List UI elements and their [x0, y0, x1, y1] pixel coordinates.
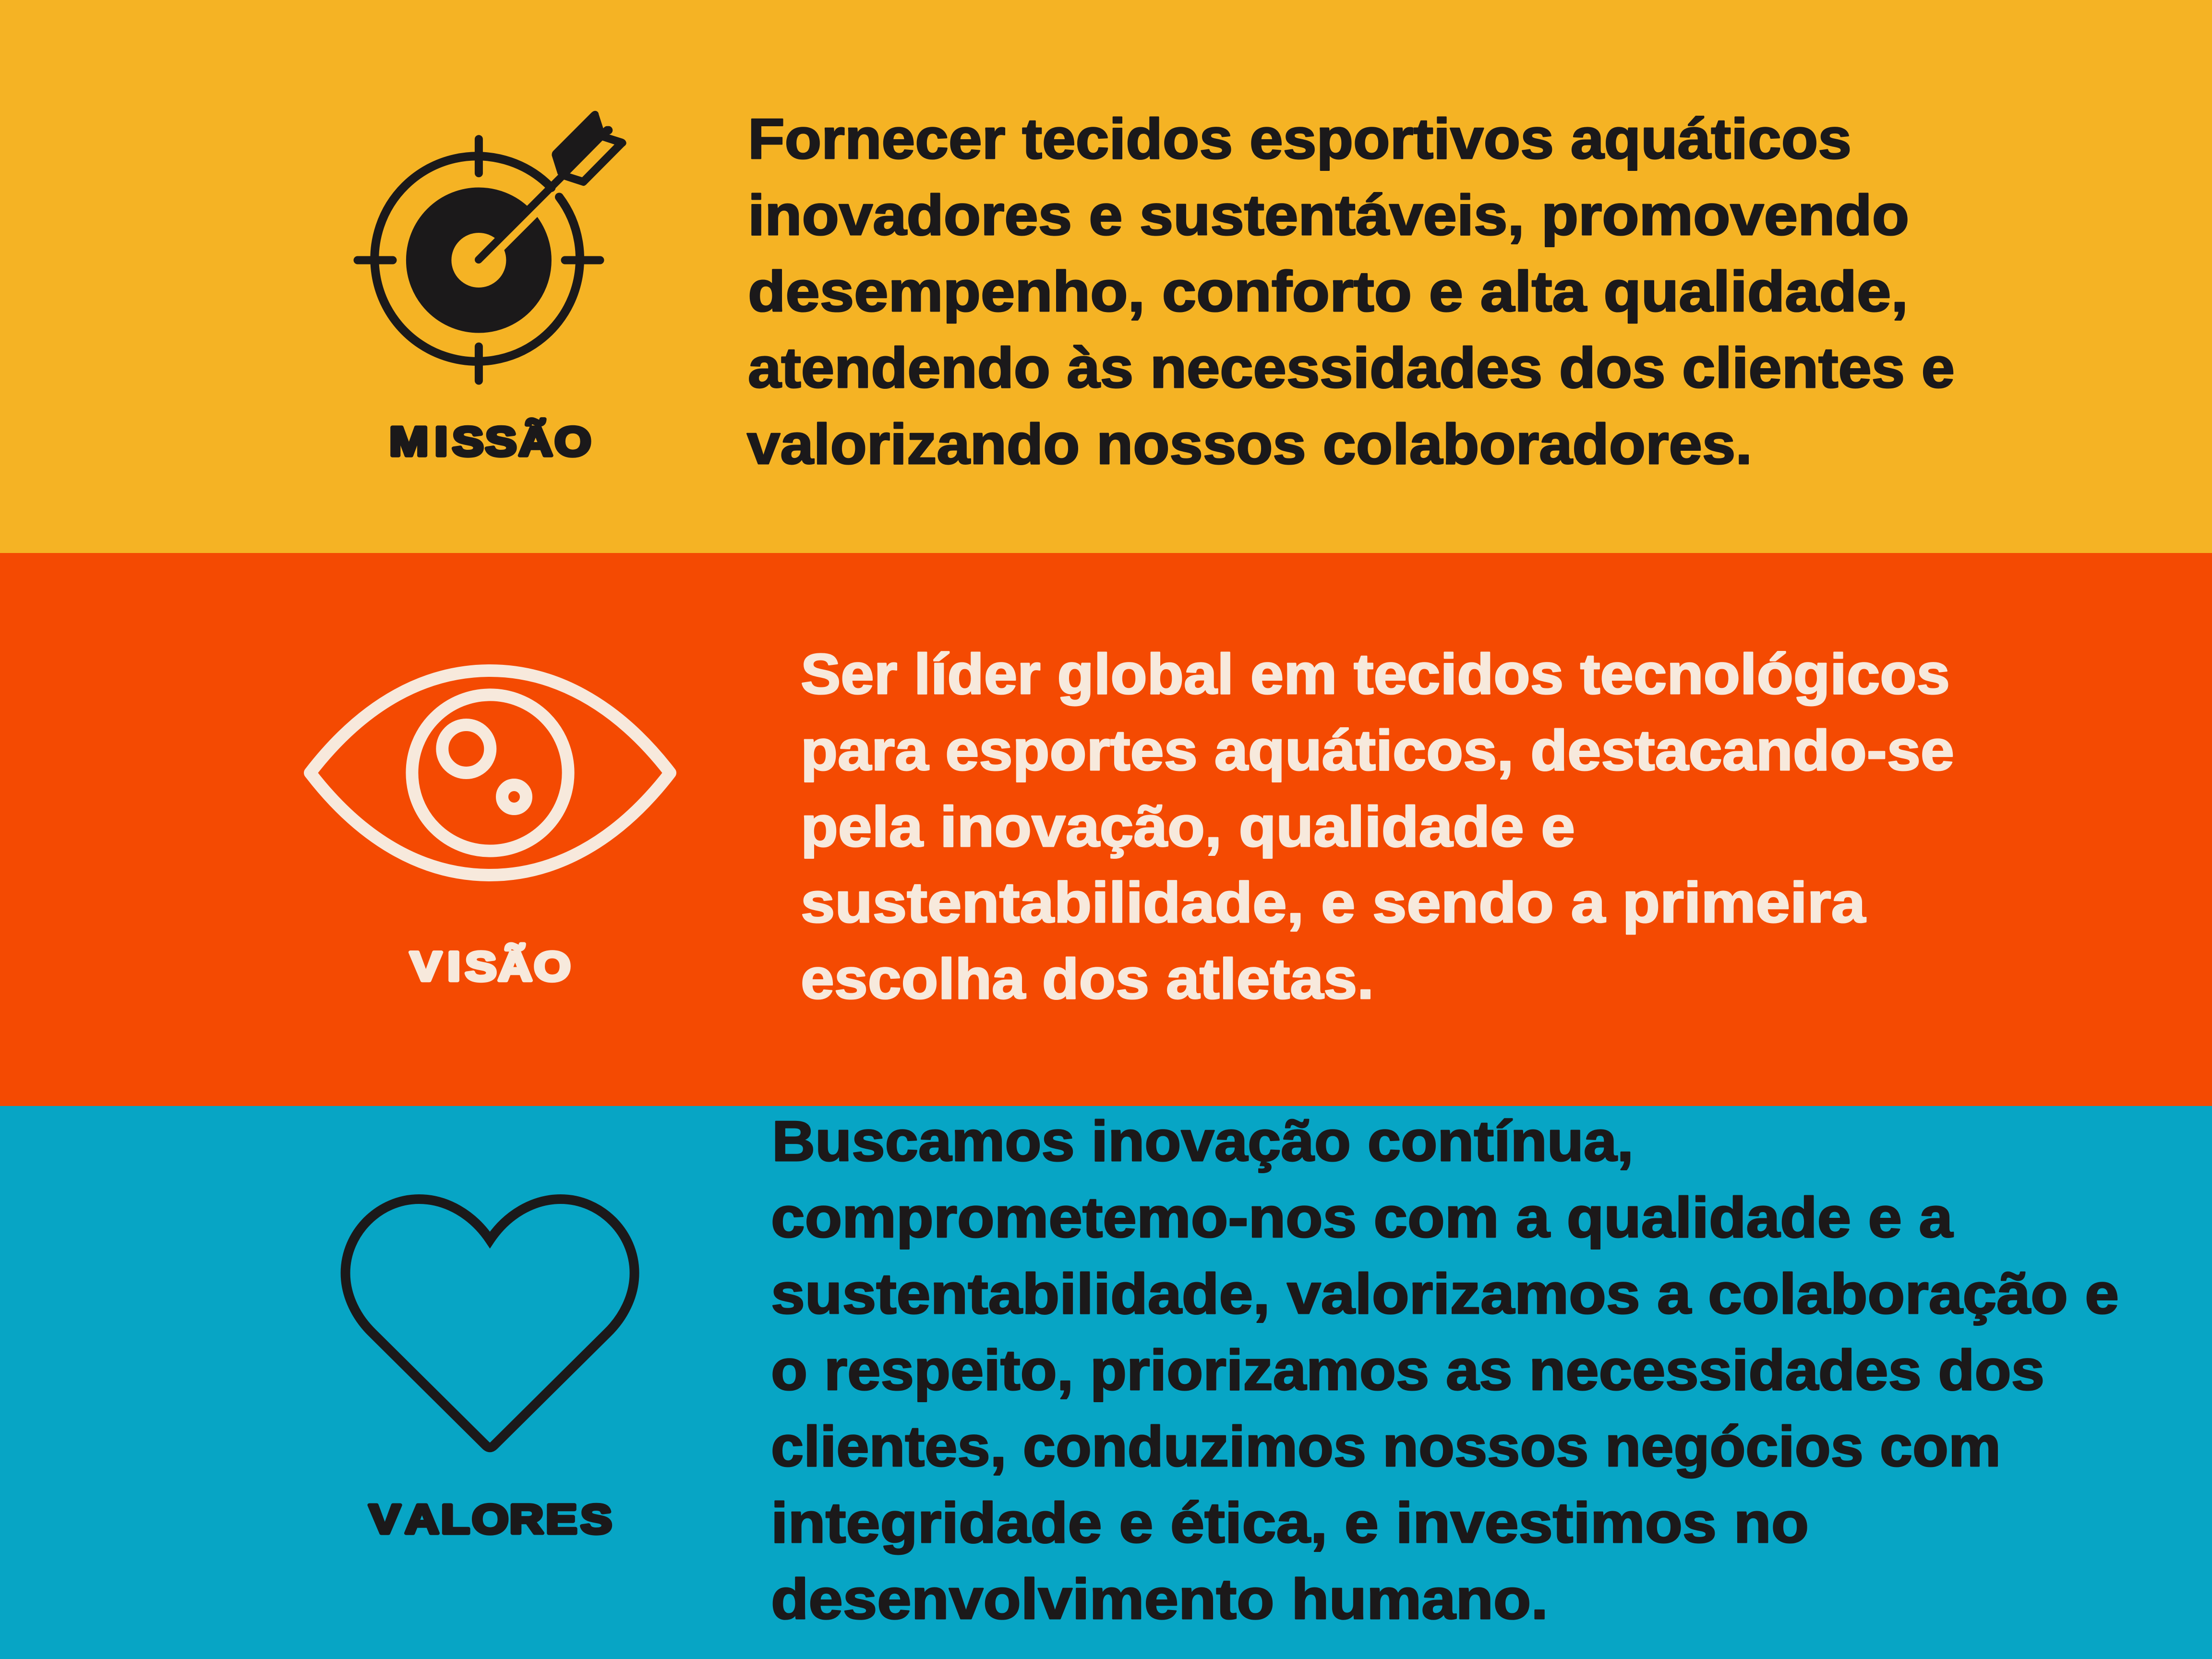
text block: valores: o respeito, priorizamos as necessidades dos — [771, 1338, 2044, 1402]
text block: visão: para esportes aquáticos, destacando-se — [801, 719, 1954, 782]
text block: visão — [801, 642, 1954, 1011]
label: MISSÃO: MISSÃO — [389, 419, 591, 464]
text block: valores: integridade e ética, e investimos no — [771, 1491, 1809, 1555]
icon: eye — [310, 671, 670, 875]
text block: visão: pela inovação, qualidade e — [801, 795, 1575, 859]
icon: target with arrow — [358, 111, 626, 381]
text block: missão: Fornecer tecidos esportivos aquáticos — [748, 107, 1851, 171]
icon: heart — [346, 1199, 635, 1447]
label: VISÃO: VISÃO — [410, 944, 571, 989]
text block: valores: clientes, conduzimos nossos negócios com — [771, 1415, 2001, 1479]
text block: visão: Ser líder global em tecidos tecnológicos — [801, 642, 1950, 706]
text block: missão: inovadores e sustentáveis, promovendo — [748, 183, 1909, 247]
panel: visão — [0, 553, 2212, 1106]
label: VALORES: VALORES — [369, 1497, 612, 1542]
text block: valores: comprometemo-nos com a qualidade e a — [771, 1186, 1953, 1250]
text block: visão: escolha dos atletas. — [801, 947, 1374, 1011]
panel: valores — [0, 1106, 2212, 1659]
text block: valores: desenvolvimento humano. — [771, 1567, 1548, 1631]
text block: visão: sustentabilidade, e sendo a primeira — [801, 871, 1866, 935]
panel: missão — [0, 0, 2212, 553]
text block: valores: Buscamos inovação contínua, — [772, 1109, 1634, 1173]
text block: valores: sustentabilidade, valorizamos a colaboração e — [771, 1262, 2119, 1326]
text block: missão — [747, 107, 1955, 476]
text block: missão: desempenho, conforto e alta qualidade, — [748, 260, 1908, 324]
text block: missão: valorizando nossos colaboradores. — [747, 412, 1752, 476]
text block: missão: atendendo às necessidades dos clientes e — [748, 336, 1955, 400]
text block: valores — [771, 1109, 2119, 1631]
